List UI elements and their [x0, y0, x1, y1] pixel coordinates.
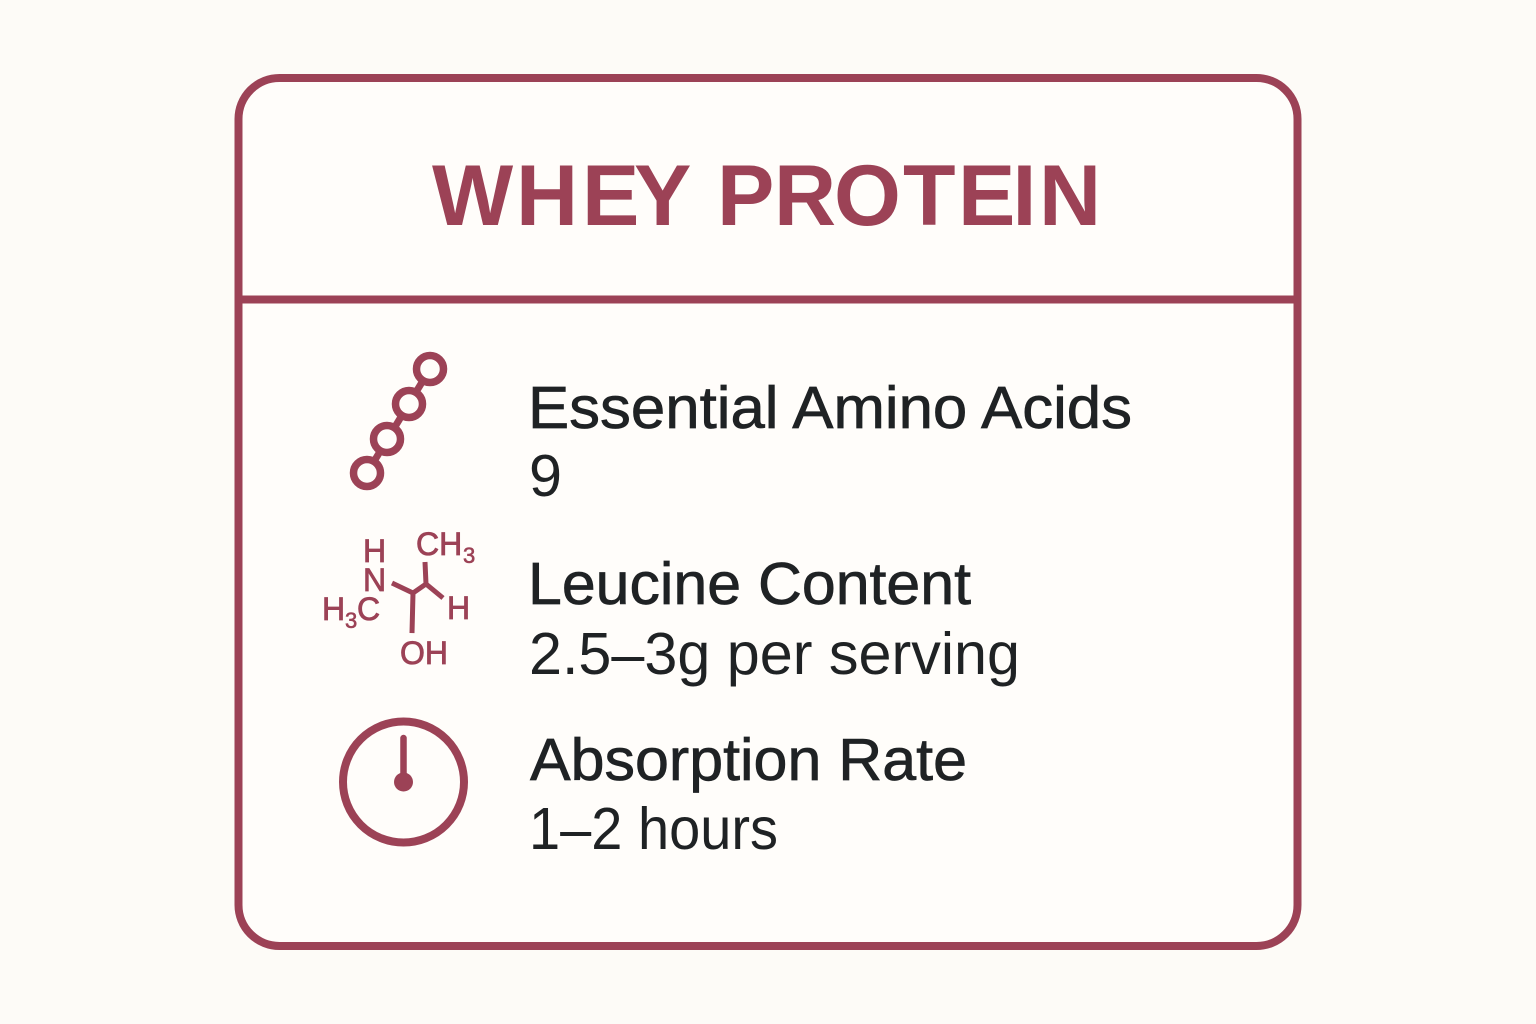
- text: essential amino acids: [528, 375, 1132, 509]
- icon: leucine molecule: [322, 526, 475, 671]
- panel: whey protein card: [238, 78, 1298, 946]
- icon: leucine molecule: OH: [400, 635, 448, 671]
- title: PROTEIN: [717, 148, 1101, 244]
- text: absorption rate: Absorption Rate: [530, 727, 967, 793]
- text: absorption rate: 1–2 hours: [529, 796, 778, 862]
- text: absorption rate: [529, 727, 967, 862]
- text: leucine content: Leucine Content: [528, 551, 971, 617]
- icon: leucine molecule: N: [363, 562, 386, 598]
- text: leucine content: [528, 551, 1020, 687]
- icon: amino acid chain: [354, 356, 444, 486]
- text: leucine content: 2.5–3g per serving: [529, 621, 1020, 687]
- icon: leucine molecule: 3: [345, 608, 357, 633]
- icon: leucine molecule: H: [363, 533, 386, 569]
- icon: leucine molecule: H: [322, 591, 345, 627]
- icon: leucine molecule: 3: [463, 543, 475, 568]
- text: essential amino acids: Essential Amino Acids: [528, 375, 1132, 441]
- icon: leucine molecule: H: [447, 590, 470, 626]
- icon: leucine molecule: CH: [416, 526, 462, 562]
- icon: leucine molecule: C: [357, 591, 380, 627]
- text: essential amino acids: 9: [529, 443, 562, 509]
- title: WHEY: [432, 148, 690, 244]
- icon: clock: [343, 722, 464, 842]
